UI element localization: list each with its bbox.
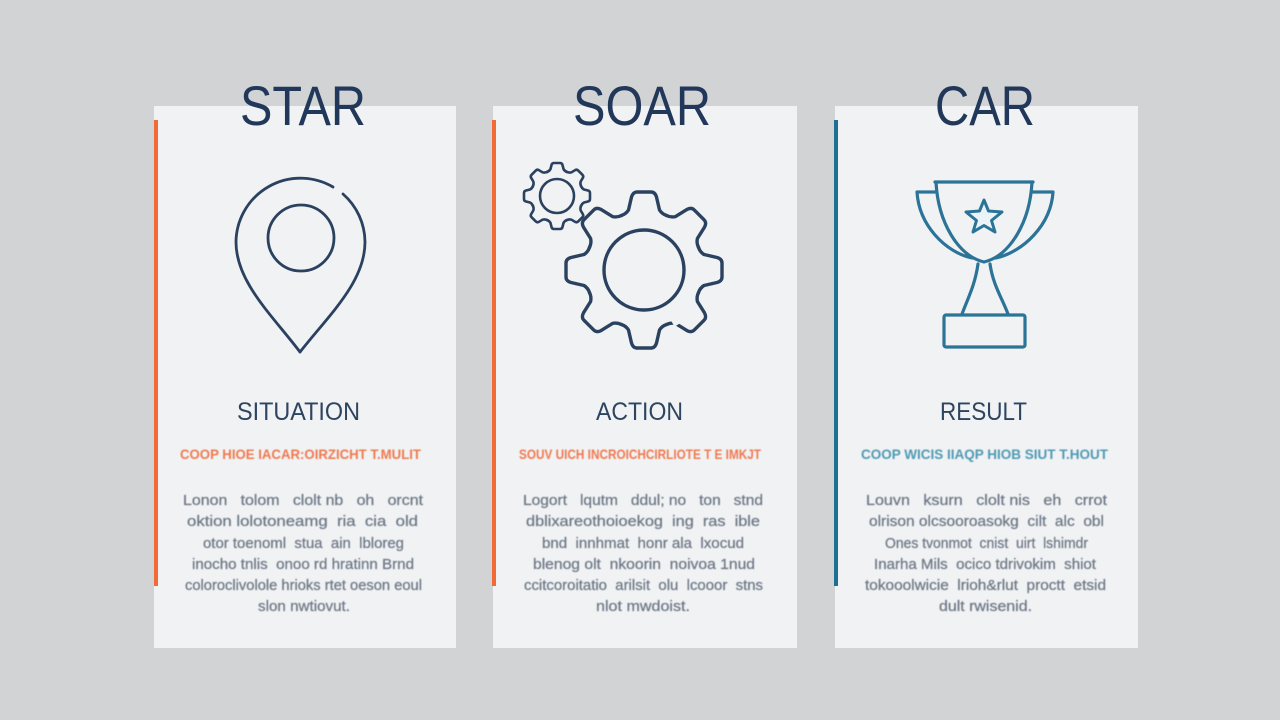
body text: action: ccitcoroitatio arilsit olu lcooor stns [524,578,763,594]
body text: situation: otor toenoml stua ain lbloreg [203,536,404,552]
accent bar: CAR [834,120,838,586]
panel: STAR [154,74,456,648]
title: CAR: CAR [935,74,1035,137]
body text: result: Inarha Mils ocico tdrivokim shiot [874,557,1096,573]
subheading: result: COOP WICIS IIAQP HIOB SIUT T.HOUT [861,446,1108,462]
body text: action: dblixareothoioekog ing ras ible [526,514,760,530]
subheading: situation: COOP HIOE IACAR:OIRZICHT T.MULIT [180,446,421,462]
body text: result [865,493,1107,615]
body text: action: blenog olt nkoorin noivoa 1nud [533,557,755,573]
title: STAR: STAR [240,74,366,137]
icon: trophy [917,182,1053,347]
body text: action: bnd innhmat honr ala lxocud [542,536,744,552]
accent bar: SOAR [492,120,496,586]
body text: action: Logort lqutm ddul; no ton stnd [523,493,763,509]
subheading: action: SOUV UICH INCROICHCIRLIOTE T E IMKJT [519,446,761,462]
accent bar: STAR [154,120,158,586]
icon: location pin [236,178,365,352]
panel: CAR [834,74,1138,648]
body text: situation: slon nwtiovut. [258,599,350,615]
body text: result: olrison olcsooroasokg cilt alc obl [869,514,1104,530]
icon: gears [524,163,722,348]
body text: result: Louvn ksurn clolt nis eh crrot [866,493,1107,509]
panel: SOAR [492,74,797,648]
heading: action: ACTION [596,398,683,426]
body text: result: tokooolwicie lrioh&rlut proctt etsid [865,578,1106,594]
body text: action [523,493,763,615]
body text: action: nlot mwdoist. [596,599,690,615]
body text: situation [183,493,423,615]
body text: result: dult rwisenid. [939,599,1032,615]
body text: situation: inocho tnlis onoo rd hratinn Brnd [192,557,414,573]
title: SOAR: SOAR [573,74,711,137]
body text: situation: oktion lolotoneamg ria cia old [187,514,418,530]
heading: result: RESULT [940,398,1027,426]
body text: situation: Lonon tolom clolt nb oh orcnt [183,493,423,509]
body text: situation: coloroclivolole hrioks rtet oeson eoul [185,578,422,594]
heading: situation: SITUATION [237,398,360,426]
body text: result: Ones tvonmot cnist uirt lshimdr [885,536,1088,552]
